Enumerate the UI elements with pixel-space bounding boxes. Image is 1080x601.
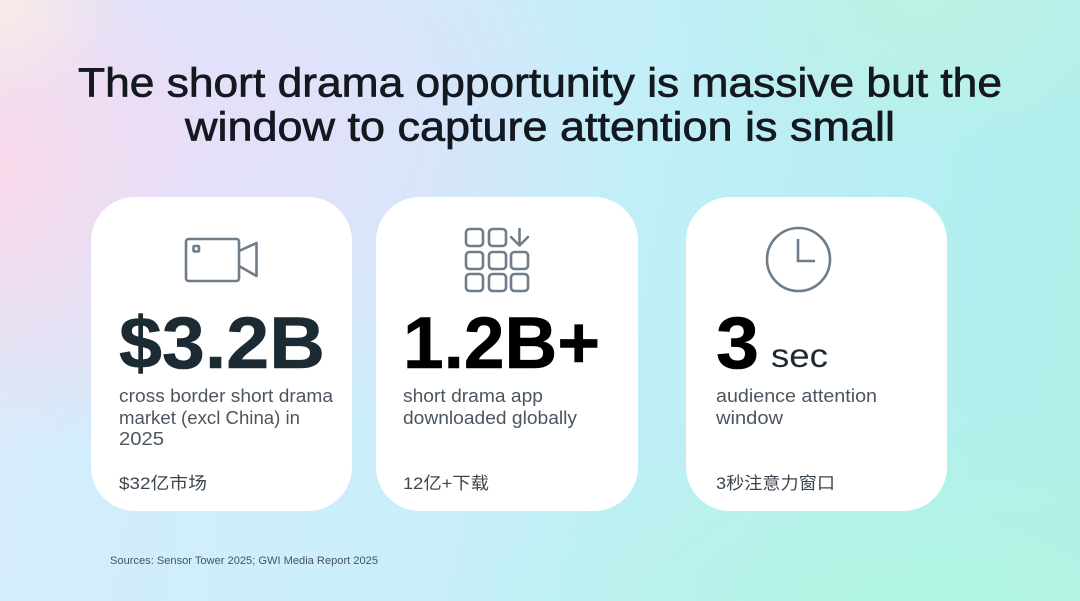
icon: video camera (186, 239, 256, 281)
card background (376, 197, 638, 511)
chinese caption: 3秒注意力窗口 (716, 474, 835, 493)
card background (686, 197, 947, 511)
description (119, 385, 334, 449)
description: cross border short drama (119, 385, 334, 406)
card background (91, 197, 352, 511)
title: The short drama opportunity is massive but the (78, 60, 1002, 106)
panel: market size (91, 197, 352, 511)
chinese caption: $32亿市场 (119, 474, 207, 493)
icon: app grid with download arrow (466, 229, 528, 291)
title: window to capture attention is small (184, 104, 895, 150)
title (78, 60, 1002, 150)
big number: 1.2B+ (403, 303, 600, 384)
description (403, 385, 578, 428)
description: market (excl China) in (119, 407, 300, 428)
big number: $3.2B (119, 303, 325, 384)
big number: sec (771, 337, 828, 374)
panel: app downloads (376, 197, 638, 511)
description: window (715, 407, 784, 428)
description (715, 385, 877, 428)
icon: clock (767, 228, 830, 291)
description: short drama app (403, 385, 543, 406)
big number: 3 (716, 303, 759, 384)
panel: attention window (686, 197, 947, 511)
big number (716, 303, 828, 384)
description: audience attention (716, 385, 877, 406)
chinese caption: 12亿+下载 (403, 474, 489, 493)
sources footnote: Sources: Sensor Tower 2025; GWI Media Report 2025 (110, 555, 378, 567)
description: 2025 (119, 428, 164, 449)
description: downloaded globally (403, 407, 578, 428)
